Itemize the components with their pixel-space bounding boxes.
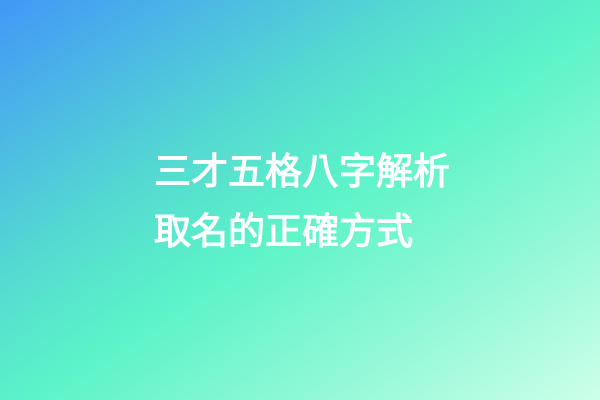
title xyxy=(154,151,450,252)
title: 三才五格八字解析 xyxy=(154,151,450,192)
title: 取名的正確方式 xyxy=(154,211,413,252)
